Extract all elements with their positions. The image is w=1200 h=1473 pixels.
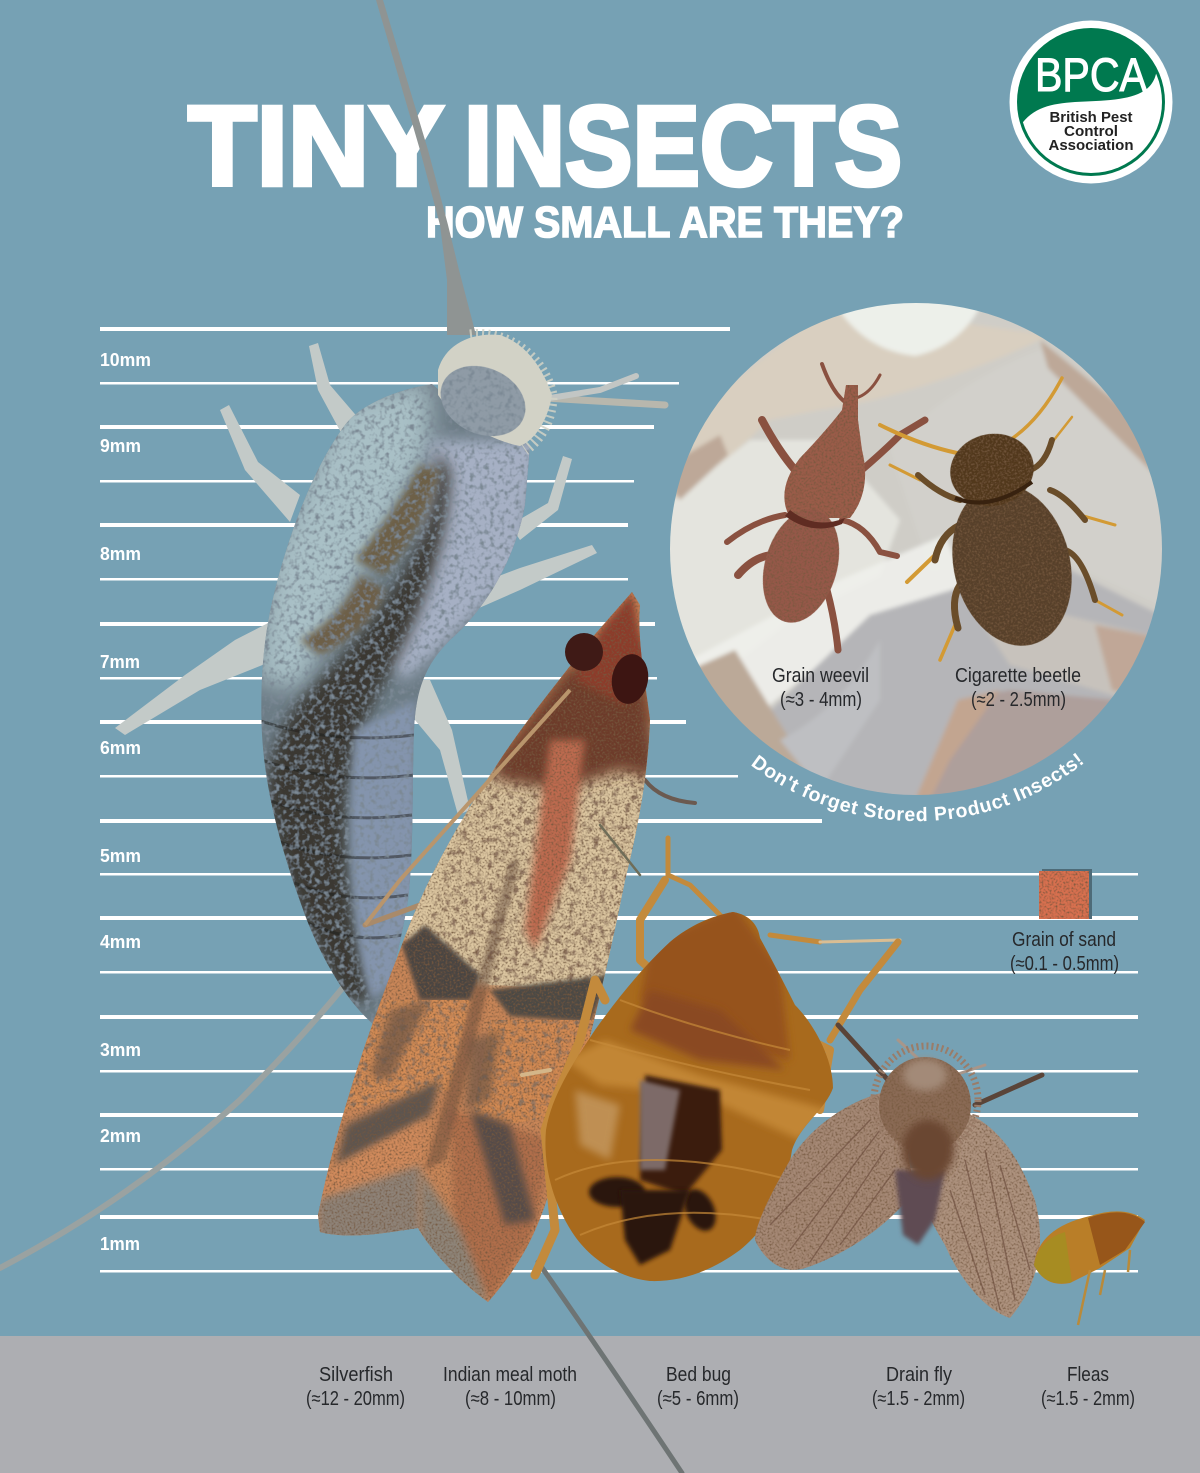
label: cigarette beetle: Cigarette beetle: [955, 665, 1081, 687]
title: INSECTS: [464, 83, 902, 209]
scale rules: [100, 327, 1138, 1272]
label: cigarette beetle: [955, 665, 1081, 711]
label: silverfish: Silverfish: [319, 1364, 393, 1386]
title: [188, 83, 904, 247]
curved caption: Don't forget Stored Product Insects!: [751, 752, 1084, 822]
label: drain fly: Drain fly: [886, 1364, 952, 1386]
body: [261, 384, 530, 1024]
scale labels: 9mm: [100, 436, 141, 456]
label: grain of sand: (≈0.1 - 0.5mm): [1010, 953, 1119, 975]
logo: BPCA: BPCA: [1035, 48, 1148, 101]
label: drain fly: (≈1.5 - 2mm): [872, 1388, 965, 1410]
label: indian meal moth: Indian meal moth: [443, 1364, 577, 1386]
label: silverfish: (≈12 - 20mm): [306, 1388, 405, 1410]
label: bed bug: [657, 1364, 739, 1410]
flea: [1034, 1211, 1145, 1325]
silverfish: [115, 0, 665, 1040]
label: fleas: Fleas: [1067, 1364, 1109, 1386]
footer band: [0, 1336, 1200, 1473]
antenna: [376, 0, 476, 335]
scale labels: [100, 350, 151, 1254]
scale labels: 3mm: [100, 1040, 141, 1060]
label: indian meal moth: [443, 1364, 577, 1410]
scale labels: 10mm: [100, 350, 151, 370]
scale labels: 2mm: [100, 1126, 141, 1146]
label: silverfish: [306, 1364, 405, 1410]
label: grain of sand: [1010, 929, 1119, 975]
label: indian meal moth: (≈8 - 10mm): [465, 1388, 556, 1410]
right wing: [915, 1110, 1040, 1318]
head: [438, 335, 552, 446]
indian meal moth: [310, 585, 695, 1310]
scale labels: 1mm: [100, 1234, 140, 1254]
logo: BPCA: Control: [1064, 124, 1118, 140]
label: grain weevil: [772, 665, 869, 711]
label: grain weevil: (≈3 - 4mm): [780, 689, 862, 711]
label: drain fly: [872, 1364, 965, 1410]
label: fleas: [1041, 1364, 1135, 1410]
icon: grain of sand: [1039, 869, 1092, 919]
legs: [115, 343, 597, 815]
label: cigarette beetle: (≈2 - 2.5mm): [971, 689, 1066, 711]
label: bed bug: (≈5 - 6mm): [657, 1388, 739, 1410]
icon: cigarette beetle: [880, 378, 1122, 660]
scale labels: 4mm: [100, 932, 141, 952]
silverfish tail filaments: [0, 985, 682, 1473]
stored product insects disc: [670, 303, 1162, 822]
label: grain of sand: Grain of sand: [1012, 929, 1116, 951]
label: bed bug: Bed bug: [666, 1364, 731, 1386]
logo: BPCA: British Pest: [1050, 110, 1133, 126]
left wing: [755, 1090, 915, 1270]
label: grain weevil: Grain weevil: [772, 665, 869, 687]
subtitle: HOW SMALL ARE THEY?: [426, 198, 904, 247]
scale labels: 8mm: [100, 544, 141, 564]
bed bug: [522, 825, 900, 1285]
logo: BPCA: [1010, 20, 1180, 185]
title: TINY: [188, 83, 444, 209]
scale labels: 6mm: [100, 738, 141, 758]
label: fleas: (≈1.5 - 2mm): [1041, 1388, 1135, 1410]
scale labels: 7mm: [100, 652, 140, 672]
logo: BPCA: Association: [1048, 138, 1134, 154]
drain fly: [755, 1025, 1042, 1318]
scale labels: 5mm: [100, 846, 141, 866]
icon: grain weevil: [727, 364, 925, 650]
